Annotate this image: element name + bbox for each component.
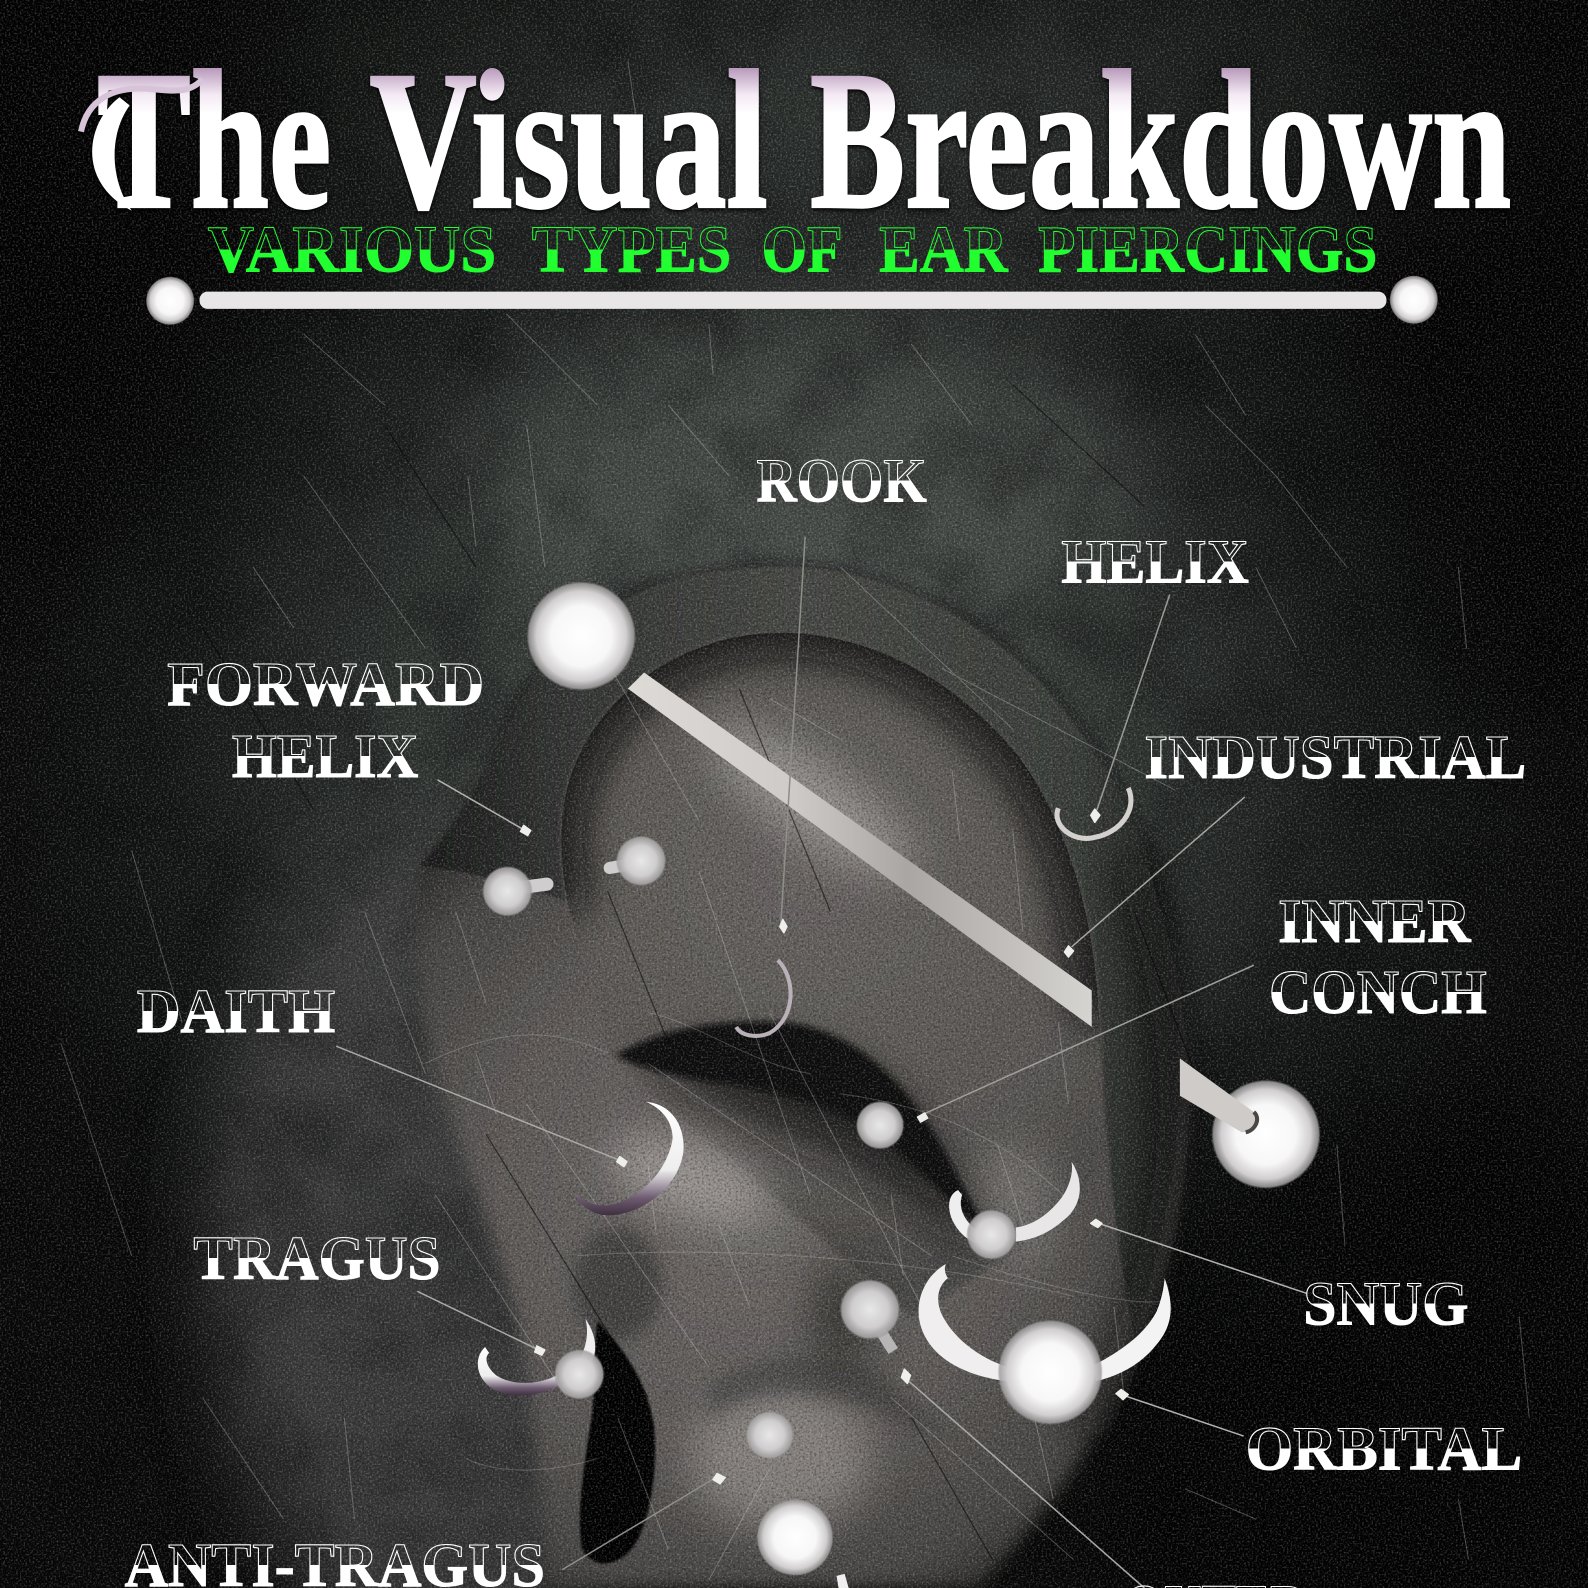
lower bar segment: [1180, 1058, 1256, 1132]
label: orbital: ORBITAL: [1246, 1414, 1522, 1484]
label: inner conch: INNER: [1278, 886, 1471, 956]
subtitle: TYPES: [532, 212, 731, 286]
leader lines and diamond markers: [336, 537, 1306, 1588]
tragus ring and ball: [478, 1319, 605, 1400]
piercing labels: [125, 445, 1526, 1588]
label: rook: ROOK: [757, 445, 927, 515]
anti-tragus studs: [745, 1411, 849, 1588]
label: forward helix: FORWARD: [167, 649, 484, 719]
label: industrial: INDUSTRIAL: [1144, 722, 1526, 792]
deep crease of the concha: [616, 1022, 1003, 1266]
subtitle: EAR: [879, 212, 1008, 286]
title: Visual: [370, 31, 768, 250]
helix rim band: [420, 566, 1180, 1337]
ear body: [418, 566, 1188, 1588]
rook ring: [736, 960, 791, 1036]
ear illustration: [418, 566, 1188, 1588]
inner shadow along the arch: [558, 633, 1099, 1023]
soft highlights and shadows on the cartilage: [573, 699, 1174, 1529]
barbell divider under the title: [146, 275, 1438, 325]
label: inner conch: [1269, 886, 1487, 1027]
subtitle: PIERCINGS: [1038, 212, 1377, 286]
outer conch stud: [840, 1279, 900, 1351]
label: inner conch: CONCH: [1269, 957, 1487, 1027]
inner bowl of the ear: [561, 633, 1101, 1317]
label: helix: HELIX: [1061, 526, 1249, 596]
ear canal: [580, 1322, 655, 1563]
inner conch stud: [856, 1101, 904, 1149]
subtitle: VARIOUS: [208, 212, 496, 286]
label: forward helix: [167, 649, 484, 791]
title: The: [97, 31, 331, 250]
upper bar segment: [628, 672, 1092, 1027]
label: daith: DAITH: [137, 976, 335, 1046]
label: forward helix: HELIX: [232, 721, 418, 791]
top ball: [527, 581, 636, 691]
label: tragus: TRAGUS: [193, 1223, 441, 1293]
forward helix studs: [482, 836, 666, 917]
snug jewel: [949, 1162, 1080, 1260]
daith ring: [574, 1102, 684, 1215]
label: snug: SNUG: [1303, 1269, 1468, 1339]
subtitle: OF: [762, 212, 843, 286]
subtitle: [208, 212, 1377, 286]
orbital ring and ball: [919, 1264, 1171, 1425]
bottom ball: [1211, 1080, 1321, 1189]
title swash on the first letter: [81, 79, 203, 211]
industrial barbell: [527, 581, 1321, 1189]
title: [81, 31, 1511, 250]
helix ring: [1057, 788, 1131, 838]
